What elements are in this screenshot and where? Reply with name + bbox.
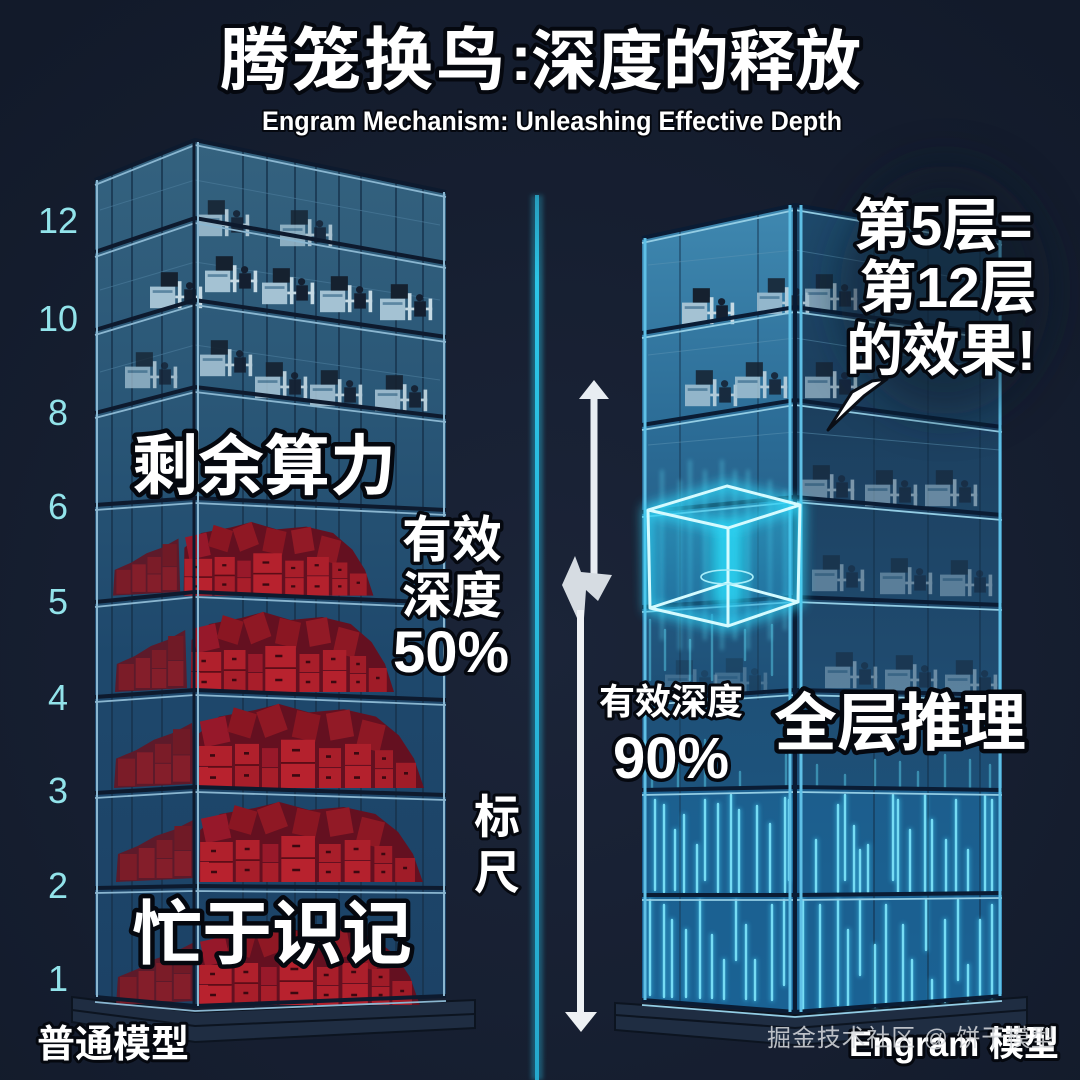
callout text: 第12层 <box>859 256 1037 320</box>
plinth <box>72 997 475 1042</box>
callout text: 的效果! <box>846 319 1036 383</box>
title: 深度的释放 <box>531 24 861 98</box>
tower edges <box>97 142 444 1006</box>
tower edges <box>645 205 1000 1012</box>
label: all-layer inference: 全层推理 <box>774 689 1026 759</box>
lit lower floors <box>642 787 1002 1012</box>
floor numbers: 2 <box>48 865 68 906</box>
label: effective depth 50%: 有效 <box>402 512 502 568</box>
floor numbers: 6 <box>48 486 68 527</box>
label: Engram model: Engram 模型 <box>849 1025 1059 1064</box>
left face <box>642 205 795 1012</box>
ceiling lines <box>100 180 440 380</box>
title: 腾笼换鸟 <box>220 22 508 99</box>
label: effective depth 50% <box>393 512 509 685</box>
floor numbers <box>38 200 78 999</box>
label: effective depth 50%: 50% <box>393 620 509 685</box>
cube body <box>648 486 800 626</box>
label: busy memorizing: 忙于识记 <box>132 895 412 973</box>
title: : <box>510 22 532 94</box>
office furniture, upper floors <box>125 200 432 411</box>
label: scale: 标 <box>474 791 520 843</box>
floor numbers: 1 <box>48 958 68 999</box>
glowing engram cube <box>648 460 800 650</box>
floor numbers: 3 <box>48 770 68 811</box>
label: scale: 尺 <box>474 847 520 899</box>
subtitle: Engram Mechanism: Unleashing Effective Depth <box>262 106 842 136</box>
floor slabs <box>95 140 446 1011</box>
callout tail <box>828 379 887 430</box>
cube wireframe <box>648 486 800 626</box>
left face <box>95 140 195 1006</box>
office furniture <box>665 274 997 696</box>
central light column <box>710 520 746 605</box>
outer glow <box>648 486 800 626</box>
left tower: standard model <box>72 140 475 1042</box>
callout text: 第5层= <box>854 194 1032 258</box>
label: effective depth 90%: 有效深度 <box>599 681 743 722</box>
plinth <box>615 997 1027 1045</box>
floor slabs <box>642 205 1002 1017</box>
right tower: Engram model <box>615 205 1027 1045</box>
right face <box>195 140 446 1006</box>
right face <box>795 205 1002 1012</box>
title <box>220 22 861 99</box>
data streams floors 1-3 <box>650 615 992 1010</box>
window mullions <box>112 140 162 1010</box>
label: effective depth 90%: 90% <box>613 726 729 791</box>
arrow: long scale arrow <box>565 610 597 1032</box>
mullions <box>874 205 980 1012</box>
floor numbers: 8 <box>48 392 68 433</box>
label: effective depth 50%: 深度 <box>402 568 502 624</box>
dark shade behind callout <box>840 165 1050 415</box>
label: standard model: 普通模型 <box>37 1024 189 1066</box>
floor numbers: 5 <box>48 581 68 622</box>
floor numbers: 10 <box>38 298 78 339</box>
center divider line <box>531 195 543 1080</box>
label: surplus compute: 剩余算力 <box>132 429 396 503</box>
ceiling lines <box>648 250 1000 450</box>
red memory boxes <box>113 522 424 1005</box>
floor numbers: 4 <box>48 677 68 718</box>
floor numbers: 12 <box>38 200 78 241</box>
glow streaks <box>662 460 785 650</box>
arrow: short double scale arrow <box>562 380 612 618</box>
label: scale <box>474 791 520 899</box>
callout text <box>846 194 1037 383</box>
inner ring <box>701 570 753 584</box>
label: effective depth 90% <box>599 681 743 791</box>
watermark: 掘金技术社区 @ 饼干模型 <box>767 1025 1055 1052</box>
